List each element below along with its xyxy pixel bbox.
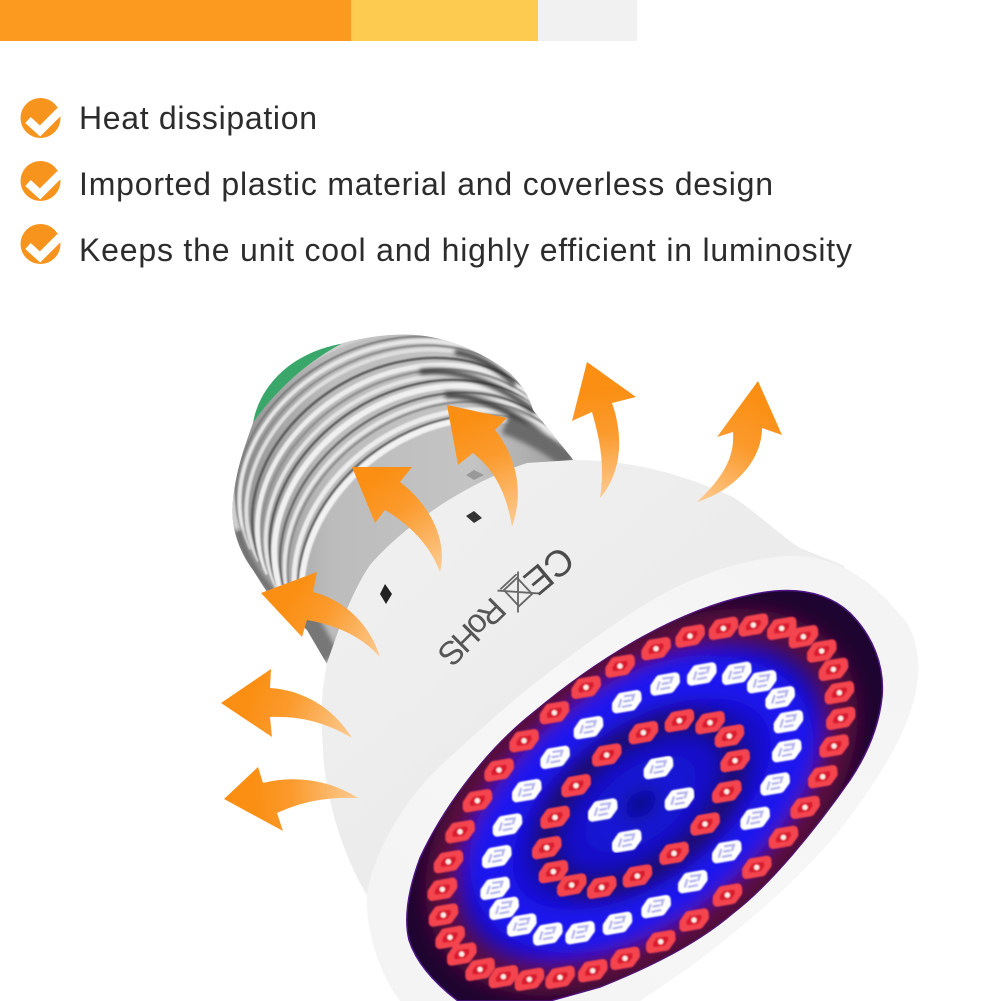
front rim [367, 556, 918, 1001]
feature: keeps the unit cool: Keeps the unit cool and highly efficient in luminosity [79, 232, 852, 268]
arrow 2 [572, 362, 636, 498]
dark reflections [238, 352, 570, 660]
CE marking: CE [516, 538, 582, 603]
RoHS marking: RoHS [431, 591, 513, 673]
arrow 1 [697, 381, 782, 502]
feature list [20, 98, 852, 268]
LED bulb [225, 328, 918, 1001]
arrow 4 [352, 467, 442, 572]
outer red LED ring [432, 618, 851, 987]
feature: heat dissipation: Heat dissipation [79, 100, 317, 136]
arrow 6 [221, 669, 352, 738]
top colour bar [0, 0, 637, 41]
LED rings [432, 618, 851, 987]
screw base [225, 328, 580, 670]
waste bin mark [498, 571, 538, 613]
feature: imported plastic: Imported plastic material and coverless design [79, 166, 773, 202]
arrow 5 [261, 572, 380, 657]
arrow 7 [224, 767, 358, 831]
blue LED ring [485, 666, 799, 941]
centre blue LEDs [592, 760, 690, 848]
board base [407, 591, 882, 1001]
board glow clipped to the disc [416, 598, 868, 1001]
vent holes [380, 470, 484, 604]
heat arrows [221, 362, 782, 831]
inner red LED ring [536, 713, 746, 895]
LED board [406, 590, 884, 1001]
arrow 3 [447, 405, 518, 527]
white body [322, 460, 845, 900]
green insulator cap [253, 343, 350, 425]
